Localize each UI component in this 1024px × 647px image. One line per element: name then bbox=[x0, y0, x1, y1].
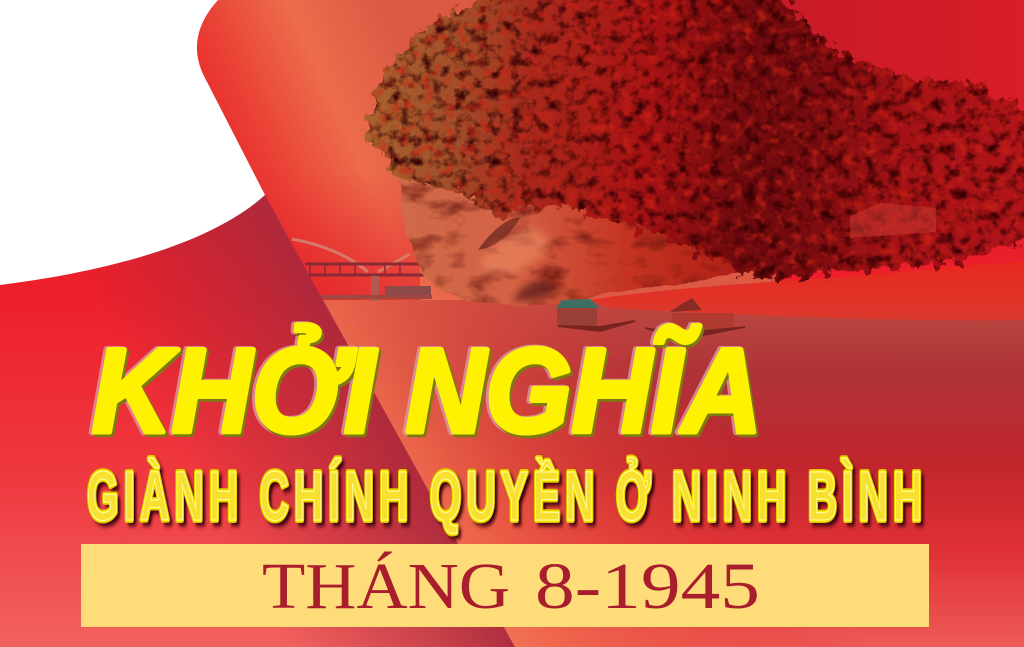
rock cliff bbox=[396, 176, 745, 306]
subtitle shadow: GIÀNH CHÍNH QUYỀN Ở NINH BÌNH bbox=[90, 460, 925, 540]
river water bbox=[280, 300, 1024, 647]
boat left bbox=[556, 299, 635, 331]
banner background bbox=[81, 544, 929, 627]
title halo: KHỞI NGHĨA bbox=[90, 324, 760, 458]
date banner bbox=[81, 544, 929, 627]
foliage canopy bbox=[366, 0, 1024, 280]
boat right bbox=[645, 298, 745, 335]
date text: THÁNG bbox=[262, 550, 510, 623]
subtitle outline: GIÀNH CHÍNH QUYỀN Ở NINH BÌNH bbox=[87, 456, 922, 536]
white corner shape bbox=[0, 0, 265, 285]
title face: KHỞI NGHĨA bbox=[92, 324, 762, 458]
date text: 8-1945 bbox=[535, 550, 760, 623]
title bevel: KHỞI NGHĨA bbox=[94, 326, 764, 460]
sky ribbon bbox=[197, 0, 780, 300]
diagonal fold shadow bbox=[0, 195, 515, 647]
subtitle: GIÀNH CHÍNH QUYỀN Ở NINH BÌNH bbox=[87, 456, 925, 540]
bridge bbox=[292, 239, 432, 301]
subtitle inline: GIÀNH CHÍNH QUYỀN Ở NINH BÌNH bbox=[87, 456, 922, 536]
date text bbox=[262, 550, 760, 623]
cave shadow bbox=[512, 280, 555, 301]
rock crease bbox=[478, 217, 520, 250]
title: KHỞI NGHĨA bbox=[90, 324, 764, 460]
temple bbox=[850, 203, 936, 238]
subtitle face: GIÀNH CHÍNH QUYỀN Ở NINH BÌNH bbox=[87, 456, 922, 536]
top right sky bbox=[782, 0, 1006, 100]
beach bbox=[590, 262, 1024, 320]
distant town bbox=[385, 286, 431, 295]
rock lit face bbox=[480, 230, 548, 276]
